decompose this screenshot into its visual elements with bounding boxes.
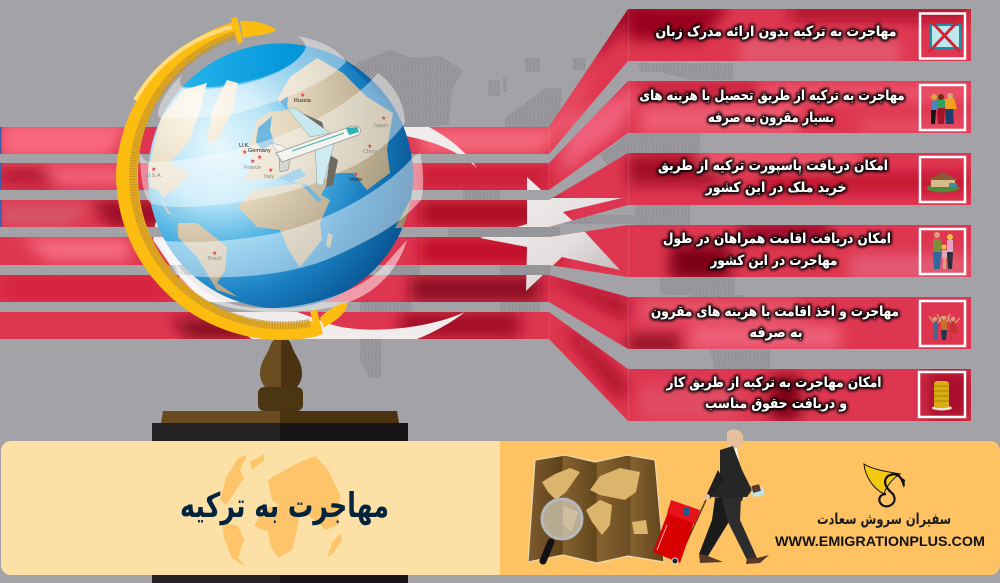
city labels: ★ — [381, 115, 386, 122]
crescent — [153, 127, 477, 339]
inland seas — [256, 96, 322, 202]
globe — [140, 36, 423, 312]
icon frame: cheering people — [920, 301, 965, 346]
logo bird — [864, 464, 905, 506]
panel texts — [640, 24, 904, 412]
icon frame: students — [920, 85, 965, 130]
panel 5 text: مهاجرت و اخذ اقامت با هزینه های مقرون — [651, 304, 899, 320]
panel satin — [628, 5, 971, 420]
panel 5 text — [651, 304, 899, 341]
land masses — [148, 58, 413, 297]
bottom left panel — [1, 441, 511, 575]
panel icons — [919, 14, 965, 417]
Turkish flag ribbons — [0, 0, 1000, 440]
panel 5 text: به صرفه — [750, 325, 802, 341]
panel 2 text: مهاجرت به ترکیه از طریق تحصیل با هزینه های — [640, 88, 904, 104]
city labels: ★ — [212, 250, 217, 257]
arm tick band — [133, 35, 310, 325]
pedestal: plinth — [161, 411, 399, 423]
icon frame: family — [920, 229, 965, 274]
city labels: ★ — [300, 92, 305, 99]
panel 3 text: خرید ملک در این کشور — [705, 180, 846, 196]
panel 6 text: و دریافت حقوق مناسب — [705, 396, 847, 412]
panel 4 text — [663, 231, 891, 269]
title: مهاجرت به ترکیه — [180, 486, 389, 526]
folded map — [528, 455, 664, 563]
left edge highlight — [0, 127, 2, 227]
pedestal: collar — [258, 387, 303, 411]
magnifier — [542, 499, 582, 539]
pedestal: dark base — [152, 423, 408, 583]
city labels: China — [363, 149, 378, 155]
icon frame: no language certificate — [920, 14, 965, 58]
city labels: ★ — [353, 171, 358, 178]
pedestal — [152, 338, 408, 583]
city labels: India — [350, 177, 363, 183]
top cap — [231, 17, 276, 44]
pedestal: neck — [260, 338, 302, 388]
bottom right panel — [500, 429, 1000, 575]
city labels: ★ — [367, 143, 372, 150]
city labels: Russia — [294, 98, 312, 104]
airplane — [271, 108, 360, 187]
city labels: France — [244, 165, 261, 171]
city labels: Japan — [373, 123, 388, 129]
city labels: ★ — [257, 154, 262, 161]
icon frame: house — [920, 157, 965, 202]
city labels: ★ — [151, 166, 156, 173]
star — [480, 177, 622, 291]
arm highlight — [135, 27, 232, 100]
city labels — [146, 92, 388, 262]
panel 2 text — [640, 88, 904, 126]
city labels: ★ — [242, 149, 247, 156]
translucent rings — [140, 36, 423, 312]
dotted world map — [353, 50, 770, 378]
globe arm — [116, 17, 347, 340]
top ocean cap — [182, 44, 306, 89]
icon frame: gold coins — [919, 372, 965, 417]
panel 2 text: بسیار مقرون به صرفه — [708, 110, 834, 126]
panel 4 text: مهاجرت در این کشور — [710, 253, 838, 269]
satin shading — [0, 5, 650, 400]
panel 6 text: امکان مهاجرت به ترکیه از طریق کار — [666, 375, 882, 391]
city labels: ★ — [268, 167, 273, 174]
panel 3 text — [658, 158, 888, 196]
panel 6 text — [666, 375, 882, 412]
city labels: Italy — [264, 174, 274, 180]
city labels: ★ — [250, 158, 255, 165]
faded world map — [220, 454, 342, 566]
website: WWW.EMIGRATIONPLUS.COM — [775, 533, 985, 549]
traveller man — [699, 429, 769, 564]
panel 4 text: امکان دریافت اقامت همراهان در طول — [663, 231, 891, 247]
suitcase — [653, 500, 706, 564]
bottom cap — [310, 303, 347, 336]
city labels: U.K. — [239, 143, 250, 149]
city labels: Germany — [248, 148, 271, 154]
panel 3 text: امکان دریافت پاسپورت ترکیه از طریق — [658, 158, 888, 174]
city labels: U.S.A. — [146, 173, 162, 179]
city labels: Brazil — [208, 256, 222, 262]
company name: سفیران سروش سعادت — [817, 510, 951, 528]
panel 1 text: مهاجرت به ترکیه بدون ارائه مدرک زبان — [656, 24, 896, 40]
